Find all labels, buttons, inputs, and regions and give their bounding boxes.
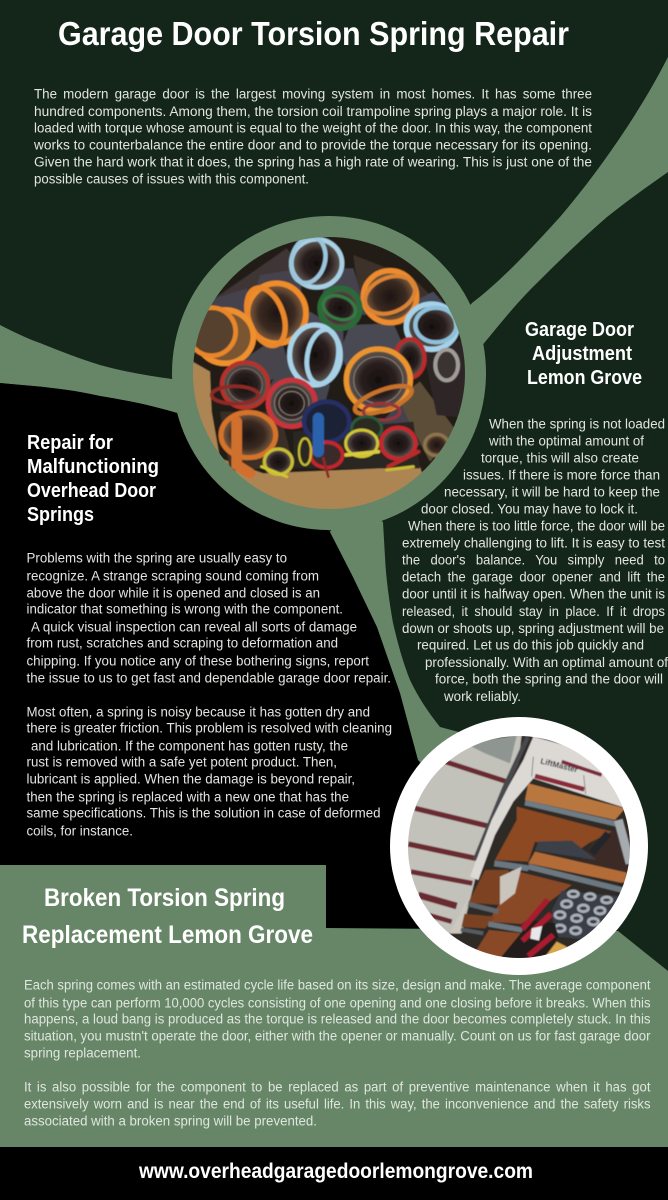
adjustment paragraph: extremely challenging to lift. It is easy to test xyxy=(402,536,665,550)
repair paragraphs: Most often, a spring is noisy because it has gotten dry and xyxy=(26,704,370,720)
heading: garage door adjustment: Garage Door xyxy=(525,319,634,341)
adjustment paragraph: with the optimal amount of xyxy=(488,434,644,448)
heading: broken torsion spring replacement: Replacement Lemon Grove xyxy=(22,921,313,949)
adjustment paragraph: When the spring is not loaded xyxy=(489,416,665,432)
adjustment paragraph: necessary, it will be hard to keep the xyxy=(444,484,660,500)
repair paragraphs: A quick visual inspection can reveal all sorts of damage xyxy=(31,620,357,634)
adjustment paragraph: force, both the spring and the door will xyxy=(435,672,663,686)
replacement paragraphs: of this type can perform 10,000 cycles consisting of one opening and one closing before it breaks. When this xyxy=(24,996,651,1010)
intro paragraph: possible causes of issues with this component. xyxy=(34,172,309,186)
left green ribbon xyxy=(0,325,200,425)
adjustment paragraph: required. Let us do this job quickly and xyxy=(417,638,644,652)
repair paragraphs: from rust, scratches and scraping to deformation and xyxy=(26,636,338,650)
intro paragraph: Given the hard work that it does, the spring has a high rate of wearing. This is just one of the xyxy=(34,154,592,170)
replacement paragraphs xyxy=(24,978,651,1128)
title: Garage Door Torsion Spring Repair xyxy=(58,15,569,52)
footer website address: www.overheadgaragedoorlemongrove.com xyxy=(138,1160,533,1183)
heading: repair for malfunctioning overhead door springs: Repair for xyxy=(27,432,113,454)
repair paragraphs: there is greater friction. This problem is resolved with cleaning xyxy=(26,720,392,736)
lower green section with heading tab xyxy=(0,865,668,1147)
repair paragraphs: indicator that something is wrong with the component. xyxy=(26,602,343,616)
replacement paragraphs: spring replacement. xyxy=(24,1046,141,1060)
intro paragraph: hundred components. Among them, the torsion coil trampoline spring plays a major role. It is xyxy=(34,104,592,119)
spring rings drawn as ellipses xyxy=(188,233,458,477)
replacement paragraphs: extensively worn and is near the end of its useful life. In this way, the inconvenience and the safety risks xyxy=(24,1096,651,1112)
intro paragraph: works to counterbalance the entire door and to provide the torque necessary for its opening. xyxy=(33,138,592,152)
repair paragraphs: then the spring is replaced with a new one that has the xyxy=(26,790,349,804)
heading: garage door adjustment xyxy=(525,319,642,389)
heading: broken torsion spring replacement xyxy=(22,884,313,949)
top-right green ribbon xyxy=(450,57,668,360)
adjustment paragraph: When there is too little force, the door will be xyxy=(408,518,665,534)
intro paragraph xyxy=(33,86,592,186)
intro paragraph: loaded with torque whose amount is equal to the weight of the door. In this way, the component xyxy=(34,120,592,136)
repair paragraphs: lubricant is applied. When the damage is beyond repair, xyxy=(26,772,355,786)
replacement paragraphs: associated with a broken spring will be prevented. xyxy=(24,1114,317,1128)
adjustment paragraph: torque, this will also create xyxy=(481,450,639,466)
circle frame: warehouse photo xyxy=(390,717,648,975)
repair paragraphs xyxy=(26,550,392,838)
green stem between circles xyxy=(330,500,470,790)
repair paragraphs: the issue to us to get fast and dependable garage door repair. xyxy=(26,670,391,686)
black panel xyxy=(0,383,440,928)
repair paragraphs: coils, for instance. xyxy=(26,824,133,838)
adjustment paragraph: door until it is halfway open. When the unit is xyxy=(402,586,665,602)
adjustment paragraph: down or shoots up, spring adjustment will be xyxy=(402,621,664,636)
adjustment paragraph: door closed. You may have to lock it. xyxy=(421,502,638,516)
photo: coloured torsion springs xyxy=(187,233,470,512)
replacement paragraphs: happens, a loud bang is produced as the torque is released and the door becomes completely stuck. In this xyxy=(24,1012,651,1026)
heading: repair for malfunctioning overhead door springs: Overhead Door xyxy=(27,480,156,502)
heading: repair for malfunctioning overhead door springs: Malfunctioning xyxy=(27,456,159,478)
heading: broken torsion spring replacement: Broken Torsion Spring xyxy=(44,884,285,912)
repair paragraphs: rust is removed with a safe yet potent product. Then, xyxy=(26,754,337,770)
repair paragraphs: recognize. A strange scraping sound coming from xyxy=(26,568,319,584)
heading: garage door adjustment: Lemon Grove xyxy=(527,367,642,389)
adjustment paragraph: professionally. With an optimal amount of xyxy=(425,655,668,670)
adjustment paragraph: detach the garage door opener and lift the xyxy=(402,570,665,584)
replacement paragraphs: It is also possible for the component to be replaced as part of preventive maintenance when it has got xyxy=(24,1080,651,1094)
adjustment paragraph: the door's balance. You simply need to xyxy=(402,552,665,568)
adjustment paragraph: work reliably. xyxy=(443,689,521,704)
footer bar xyxy=(0,1147,668,1200)
heading: garage door adjustment: Adjustment xyxy=(532,343,632,365)
replacement paragraphs: situation, you mustn't operate the door, either with the opener or manually. Count on us for fast garage door xyxy=(24,1028,651,1044)
repair paragraphs: Problems with the spring are usually easy to xyxy=(26,550,287,566)
heading: repair for malfunctioning overhead door springs xyxy=(27,432,159,526)
repair paragraphs: chipping. If you notice any of these bothering signs, report xyxy=(26,654,369,668)
photo: warehouse shelves of garage door parts xyxy=(402,735,638,962)
repair paragraphs: above the door while it is opened and closed is an xyxy=(26,586,320,600)
heading: repair for malfunctioning overhead door springs: Springs xyxy=(27,504,94,526)
repair paragraphs: same specifications. This is the solution in case of deformed xyxy=(26,806,380,820)
photo: warehouse shelves of garage door parts: LiftMaster xyxy=(540,757,579,775)
repair paragraphs: and lubrication. If the component has gotten rusty, the xyxy=(31,738,348,754)
adjustment paragraph xyxy=(402,416,668,704)
circle frame: spring photo xyxy=(172,216,486,530)
adjustment paragraph: issues. If there is more force than xyxy=(463,468,660,482)
intro paragraph: The modern garage door is the largest moving system in most homes. It has some three xyxy=(34,86,592,102)
replacement paragraphs: Each spring comes with an estimated cycle life based on its size, design and make. The average component xyxy=(24,978,651,992)
